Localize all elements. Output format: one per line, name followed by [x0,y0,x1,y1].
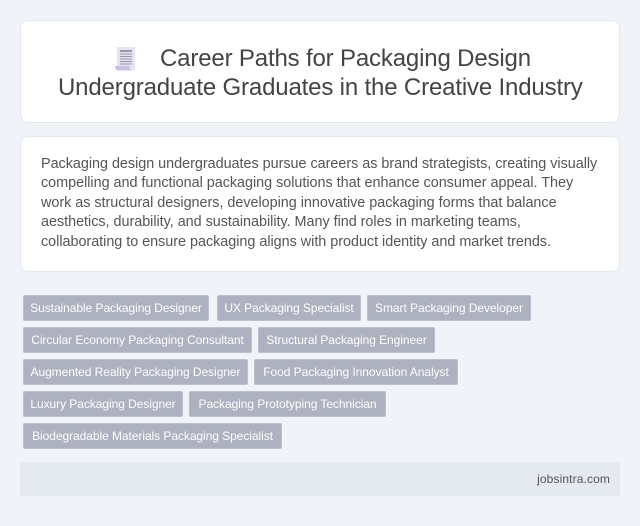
tag: Luxury Packaging Designer: Luxury Packaging Designer [30,397,176,411]
title line 1: Career Paths for Packaging Design [160,45,531,72]
footer source text: jobsintra.com [537,472,610,486]
tag: Sustainable Packaging Designer [23,295,209,321]
icon: document scroll [115,47,135,70]
tag: Circular Economy Packaging Consultant: Circular Economy Packaging Consultant [31,333,244,347]
tag: Circular Economy Packaging Consultant [23,327,252,353]
tag: Food Packaging Innovation Analyst [254,359,458,385]
tag: Augmented Reality Packaging Designer: Augmented Reality Packaging Designer [31,365,240,379]
tag: Biodegradable Materials Packaging Specialist: Biodegradable Materials Packaging Specialist [32,429,273,443]
description text: compelling and functional packaging solutions that enhance consumer appeal. They [41,175,573,191]
description text: aesthetics, durability, and sustainability. Many find roles in marketing teams, [41,214,521,230]
tag: Smart Packaging Developer: Smart Packaging Developer [375,301,523,315]
description text: collaborating to ensure packaging aligns with product identity and market trends. [41,234,551,250]
tag: Smart Packaging Developer [367,295,531,321]
tag: Sustainable Packaging Designer: Sustainable Packaging Designer [30,301,202,315]
description panel [20,136,620,272]
tag: Structural Packaging Engineer: Structural Packaging Engineer [266,333,427,347]
tag: UX Packaging Specialist [217,295,361,321]
tag: Food Packaging Innovation Analyst: Food Packaging Innovation Analyst [263,365,449,379]
tag: Luxury Packaging Designer [23,391,183,417]
description text: work as structural designers, developing innovative packaging forms that balance [41,195,557,211]
tag: Structural Packaging Engineer [258,327,435,353]
tag: Biodegradable Materials Packaging Specialist [23,423,282,449]
title line 2: Undergraduate Graduates in the Creative Industry [58,74,583,101]
description text: Packaging design undergraduates pursue careers as brand strategists, creating visually [41,156,597,172]
tag: Packaging Prototyping Technician [189,391,386,417]
tag: Augmented Reality Packaging Designer [23,359,248,385]
tag: UX Packaging Specialist: UX Packaging Specialist [224,301,354,315]
footer bar [20,462,620,496]
tag: Packaging Prototyping Technician: Packaging Prototyping Technician [198,397,376,411]
description text [41,156,598,250]
header panel [20,20,620,123]
